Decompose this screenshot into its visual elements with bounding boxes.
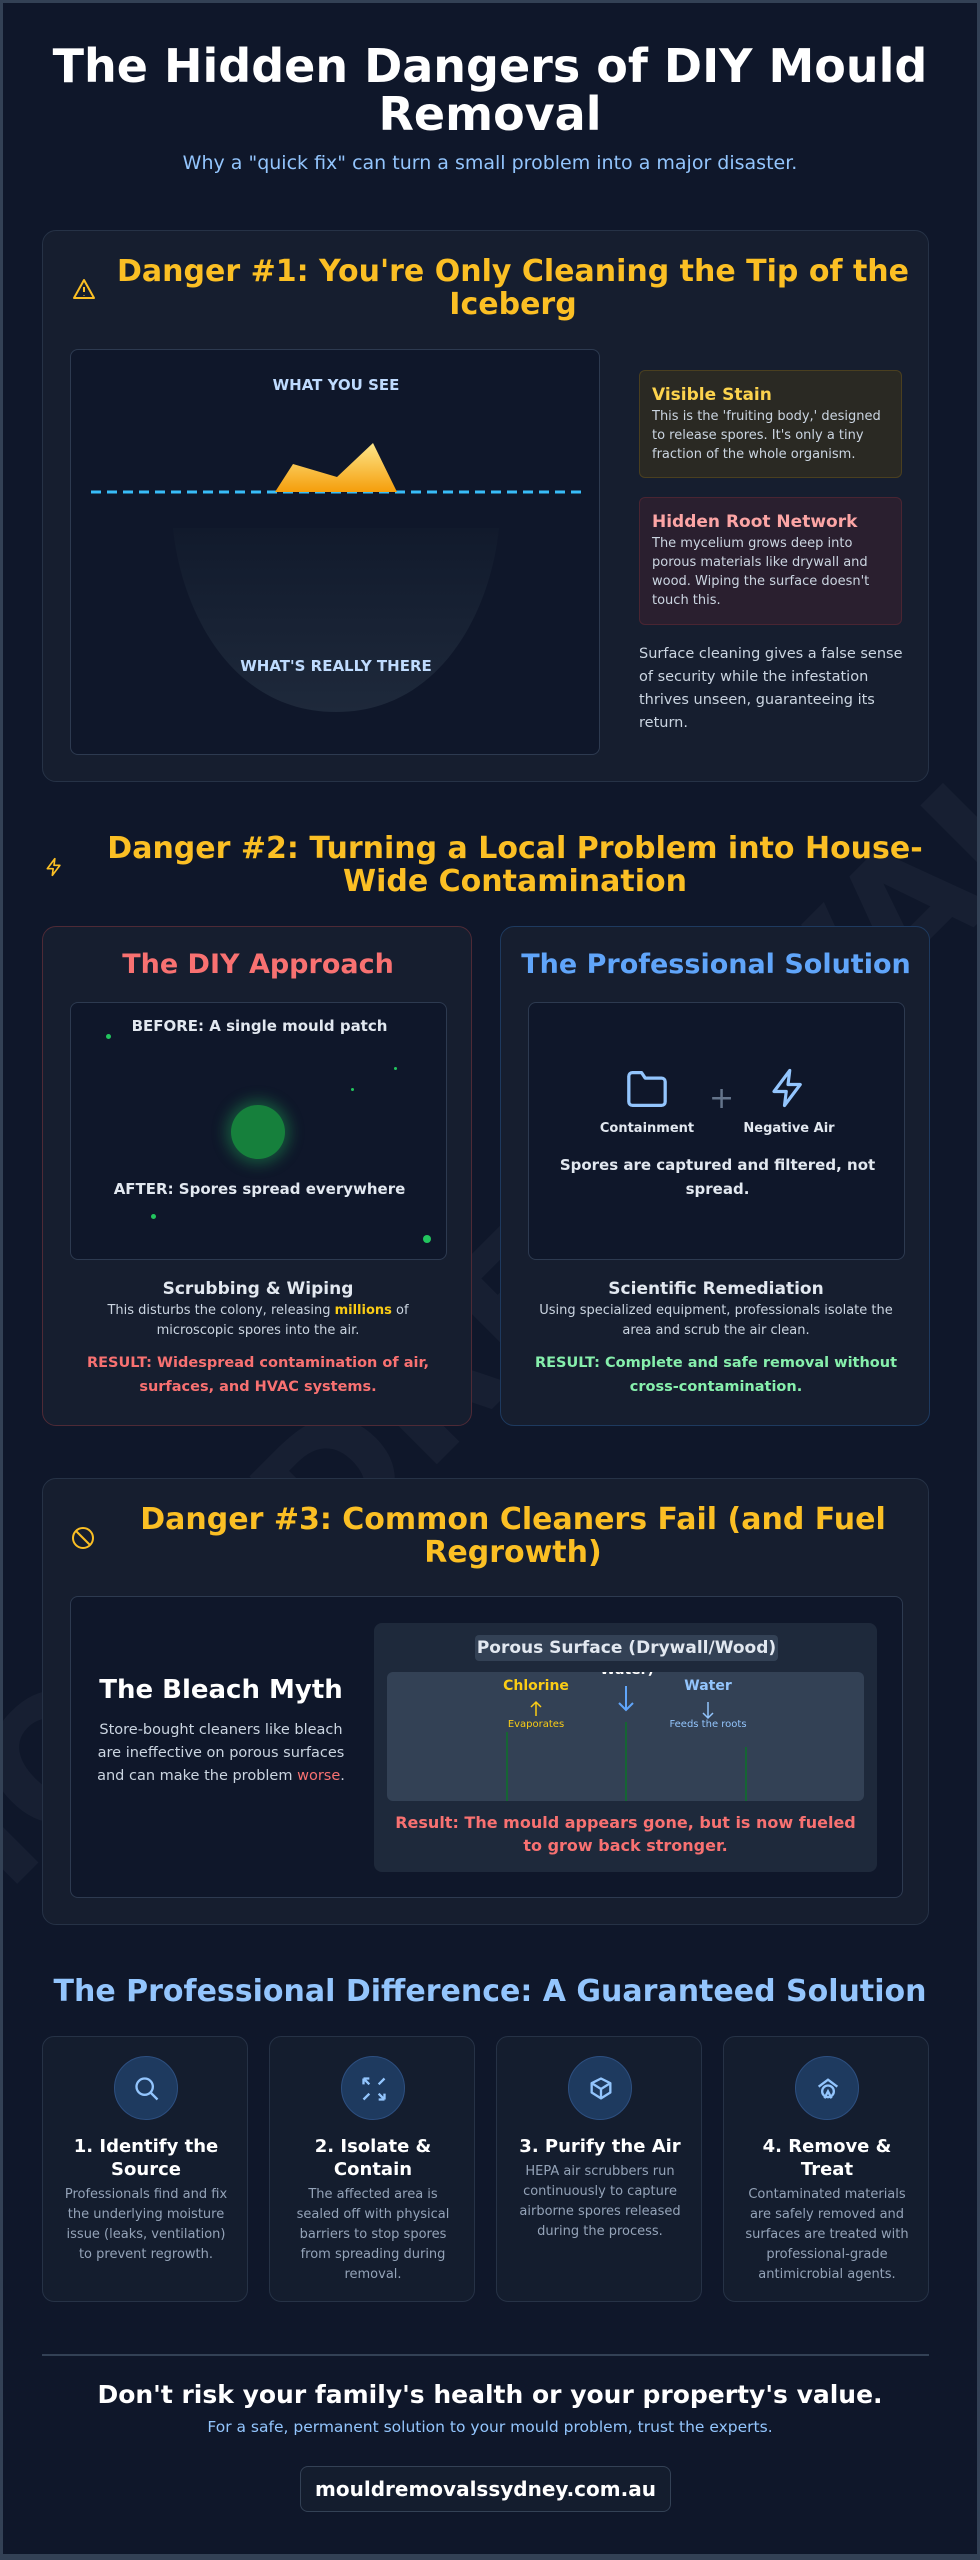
spore diagram (70, 1002, 447, 1260)
card: identify: 1. Identify the Source (74, 2136, 218, 2180)
containment diagram: Containment (600, 1121, 694, 1136)
text: false sense: Surface cleaning gives a false sense of security while the infestation thrives unseen, guaranteeing its return. (639, 646, 903, 731)
card: hidden root network: Hidden Root Network (652, 512, 857, 532)
card: hidden root network: The mycelium grows deep into porous materials like drywall and wood. Wiping the surface doesn't touch this. (652, 536, 869, 608)
text: scrubbing: This disturbs the colony, releasing millions of microscopic spores into the air. (107, 1303, 409, 1338)
panel: professional solution (500, 926, 930, 1426)
button: website (300, 2466, 671, 2512)
icon: folder (627, 1071, 667, 1107)
card: remove: Contaminated materials are safely removed and surfaces are treated with professional-grade antimicrobial agents. (745, 2187, 909, 2282)
text: scientific remediation: Using specialized equipment, professionals isolate the area and scrub the air clean. (539, 1303, 893, 1338)
card: purify (496, 2036, 702, 2302)
heading: danger 3: Danger #3: Common Cleaners Fail (and Fuel Regrowth) (140, 1502, 886, 1570)
card: visible stain: Visible Stain (652, 385, 772, 405)
button: website: mouldremovalssydney.com.au (315, 2477, 656, 2501)
icon: warning (73, 279, 95, 299)
porous surface diagram (374, 1623, 877, 1872)
text: bleach myth (97, 1675, 345, 1784)
icon: lightning (772, 1068, 802, 1108)
text: scientific remediation (535, 1279, 897, 1395)
panel: danger 3 (42, 1478, 929, 1925)
heading: danger 2: Danger #2: Turning a Local Problem into House-Wide Contamination (107, 831, 923, 899)
footer subtext: For a safe, permanent solution to your mould problem, trust the experts. (207, 2418, 773, 2436)
spore diagram: BEFORE: A single mould patch (132, 1017, 387, 1035)
card: hidden root network (639, 497, 902, 625)
text: scientific remediation: Scientific Remediation (608, 1279, 824, 1299)
iceberg diagram (70, 349, 600, 755)
containment diagram: Spores are captured and filtered, not spread. (560, 1156, 875, 1198)
bleach diagram box (70, 1596, 903, 1898)
subtitle: Why a "quick fix" can turn a small problem into a major disaster. (183, 152, 797, 174)
card: visible stain: This is the 'fruiting body,' designed to release spores. It's only a tiny fraction of the whole organism. (652, 409, 881, 462)
card: purify: 3. Purify the Air (519, 2136, 681, 2157)
card: remove (723, 2036, 929, 2302)
text: scrubbing: Scrubbing & Wiping (163, 1279, 353, 1299)
card: purify: HEPA air scrubbers run continuously to capture airborne spores released during the process. (519, 2164, 681, 2239)
icon: lightning (46, 858, 61, 876)
text: bleach myth: Store-bought cleaners like bleach are ineffective on porous surfaces and can make the problem worse. (97, 1722, 345, 1784)
porous surface diagram: Result: The mould appears gone, but is now fueled to grow back stronger. (395, 1813, 856, 1855)
text: scrubbing (87, 1279, 429, 1395)
card: identify: Professionals find and fix the underlying moisture issue (leaks, ventilation) to prevent regrowth. (65, 2187, 227, 2262)
label: what you see: WHAT YOU SEE (273, 376, 399, 394)
heading: danger 1: Danger #1: You're Only Cleaning the Tip of the Iceberg (117, 254, 909, 322)
porous surface diagram: Evaporates (508, 1719, 564, 1730)
card: identify (42, 2036, 248, 2302)
card: isolate: 2. Isolate & Contain (315, 2136, 431, 2180)
icon: ban (72, 1527, 94, 1549)
heading: professional difference: The Professional Difference: A Guaranteed Solution (54, 1974, 926, 2009)
porous surface diagram: Porous Surface (Drywall/Wood) (477, 1638, 776, 1658)
panel: DIY approach (42, 926, 472, 1426)
heading: professional: The Professional Solution (521, 949, 911, 980)
text: scientific remediation: RESULT: Complete and safe removal without cross-contamination. (535, 1355, 897, 1395)
containment diagram (528, 1002, 905, 1260)
card: isolate: The affected area is sealed off with physical barriers to stop spores from spreading during removal. (297, 2187, 449, 2282)
porous surface diagram: Feeds the roots (669, 1719, 747, 1730)
containment diagram: Negative Air (743, 1121, 835, 1136)
porous surface diagram: Chlorine (503, 1678, 569, 1694)
spore diagram: AFTER: Spores spread everywhere (114, 1180, 405, 1198)
panel: danger 1 (42, 230, 929, 782)
card: visible stain (639, 370, 902, 478)
card: isolate (269, 2036, 475, 2302)
heading: DIY: The DIY Approach (122, 949, 394, 980)
title: The Hidden Dangers of DIY Mould Removal (53, 39, 927, 141)
containment diagram: + (709, 1081, 734, 1116)
footer heading: Don't risk your family's health or your property's value. (97, 2380, 883, 2409)
card: remove: 4. Remove & Treat (763, 2136, 891, 2180)
text: bleach myth: The Bleach Myth (99, 1675, 343, 1705)
text: scrubbing: RESULT: Widespread contamination of air, surfaces, and HVAC systems. (87, 1355, 429, 1395)
label: what's really there: WHAT'S REALLY THERE (240, 657, 432, 675)
porous surface diagram: Water (684, 1678, 732, 1694)
